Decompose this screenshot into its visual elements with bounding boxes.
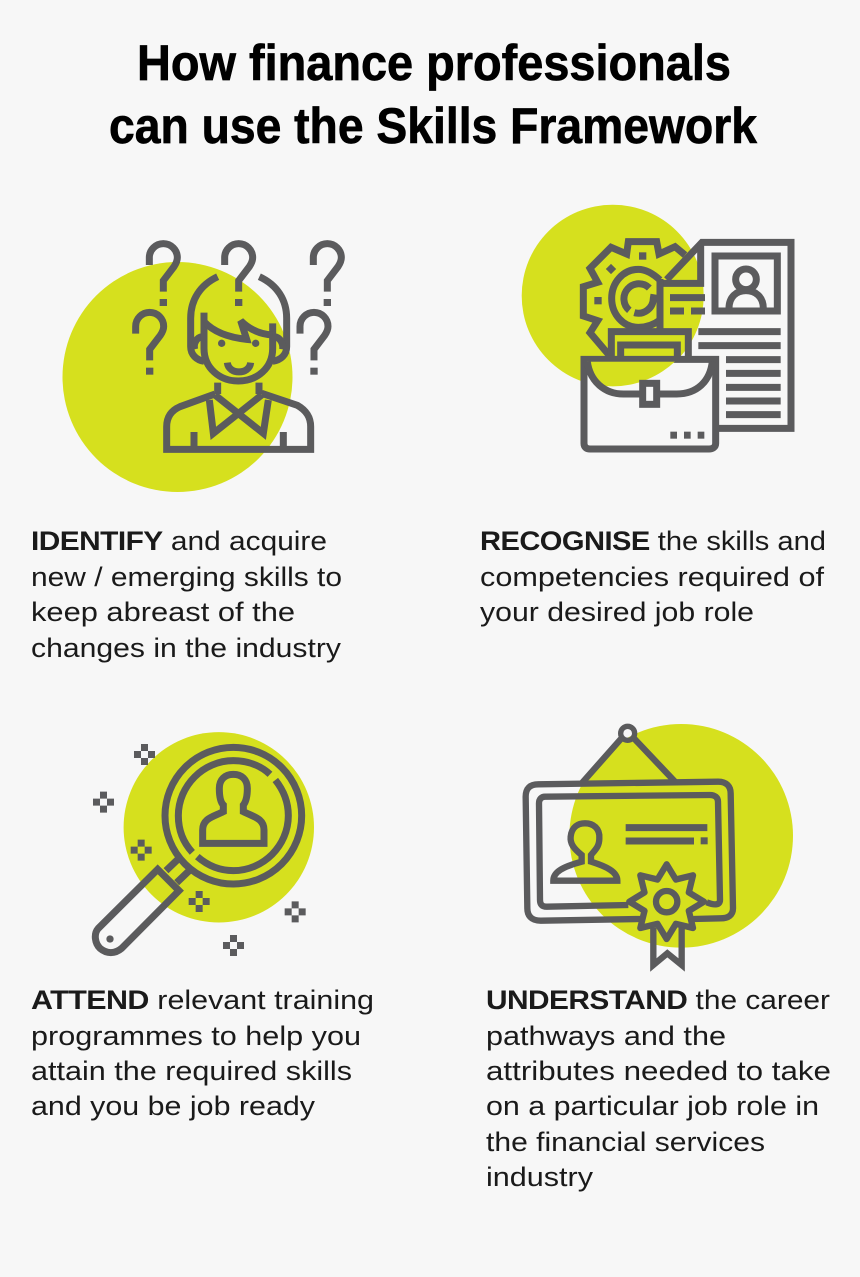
icon: hanging certificate — [526, 724, 793, 965]
text: identify: new / emerging skills to — [31, 562, 342, 592]
text: identify: IDENTIFY and acquire — [31, 526, 327, 556]
icon: magnifying glass with person — [93, 732, 314, 956]
text: recognise: your desired job role — [480, 597, 754, 627]
text: recognise: competencies required of — [480, 562, 825, 592]
text: attend — [31, 985, 374, 1121]
text: attend: and you be job ready — [31, 1091, 316, 1121]
text: understand: industry — [486, 1162, 594, 1192]
text: understand: UNDERSTAND the career — [486, 985, 830, 1015]
text: understand — [486, 985, 831, 1192]
text: understand: the financial services — [486, 1127, 765, 1157]
text: attend: ATTEND relevant training — [31, 985, 374, 1015]
panel: understand — [486, 724, 831, 1192]
text: identify: keep abreast of the — [31, 597, 295, 627]
text: understand: attributes needed to take — [486, 1056, 831, 1086]
title: can use the Skills Framework — [109, 98, 757, 154]
text: recognise: RECOGNISE the skills and — [480, 526, 826, 556]
text: identify — [31, 526, 342, 663]
panel: recognise — [480, 205, 826, 627]
text: recognise — [480, 526, 826, 627]
briefcase — [584, 359, 716, 449]
icon: person with question marks — [62, 244, 341, 492]
text: understand: on a particular job role in — [486, 1091, 819, 1121]
panel: attend — [31, 732, 374, 1121]
text: understand: pathways and the — [486, 1021, 726, 1051]
icon: gear, briefcase and resume — [522, 205, 791, 449]
panel: identify — [31, 244, 342, 663]
title: How finance professionals — [137, 35, 731, 91]
text: attend: programmes to help you — [31, 1021, 361, 1051]
text: attend: attain the required skills — [31, 1056, 352, 1086]
text: identify: changes in the industry — [31, 633, 342, 663]
title — [109, 35, 757, 154]
